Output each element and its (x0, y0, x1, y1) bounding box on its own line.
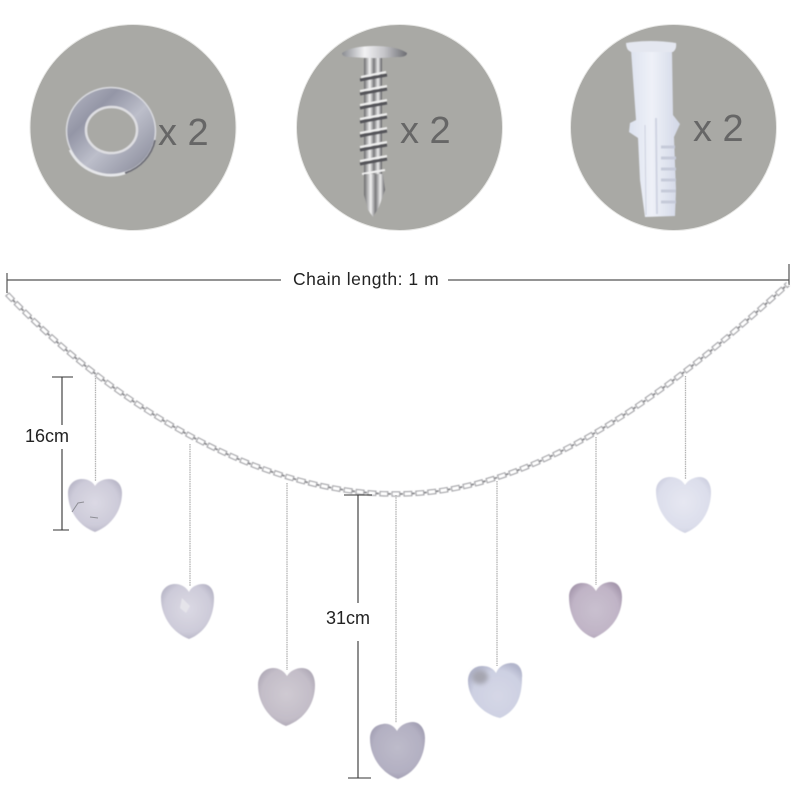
pendant heart 3 (258, 483, 315, 726)
label: 16cm: 16cm (25, 426, 69, 446)
pendant heart 2 (161, 444, 214, 639)
label: x 2: x 2 (158, 112, 209, 154)
grey circle (30, 24, 236, 230)
pendant heart 6 (569, 437, 622, 638)
dimension: chain length (7, 264, 789, 293)
pendant heart 1 (68, 378, 122, 532)
icon: washer (66, 87, 156, 175)
grey circle (570, 24, 776, 230)
dimension: 16cm (25, 377, 73, 530)
pendant heart 5 (468, 481, 522, 718)
grey circle (296, 24, 502, 230)
icon: screw (342, 46, 407, 217)
icon: wall anchor (626, 41, 680, 217)
panel: wall anchor x 2 (570, 24, 776, 230)
pendant heart 7 (656, 376, 711, 533)
pendant heart 4 (370, 495, 425, 779)
panel: washer x 2 (30, 24, 236, 230)
label: 31cm: 31cm (326, 608, 370, 628)
label: x 2: x 2 (400, 110, 451, 152)
chain (7, 284, 788, 494)
label: x 2: x 2 (693, 108, 744, 150)
label: chain length: Chain length: 1 m (293, 269, 439, 289)
dimension: 31cm (326, 495, 372, 778)
panel: screw x 2 (296, 24, 502, 230)
